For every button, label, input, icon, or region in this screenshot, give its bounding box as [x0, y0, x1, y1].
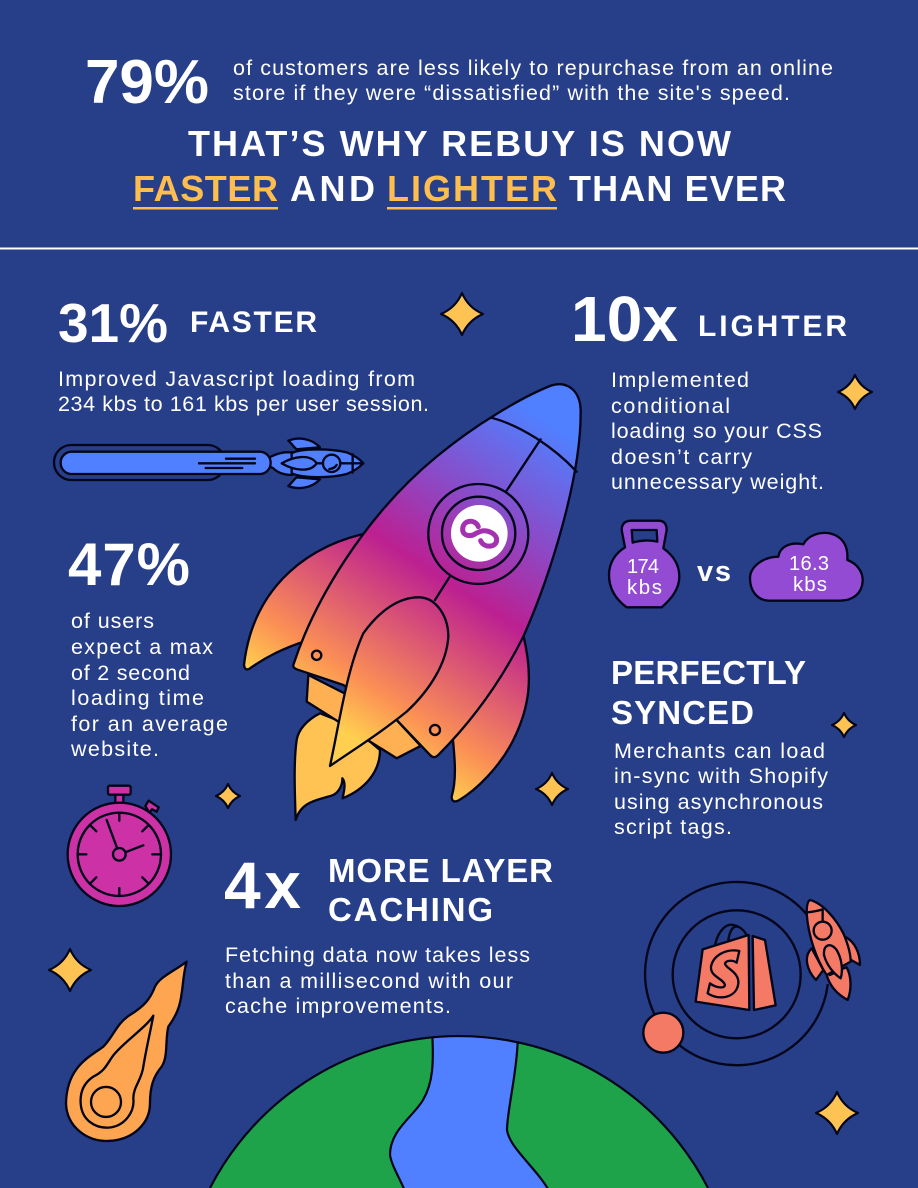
- title: THAT’S WHY REBUY IS NOW: [188, 123, 731, 164]
- stat: 10x lighter: [571, 283, 847, 494]
- flame: [295, 713, 380, 820]
- title: THAN EVER: [569, 168, 786, 209]
- kettlebell: kbs: [627, 576, 662, 599]
- right fin: [452, 635, 529, 801]
- stat: 47%: 47%: [68, 531, 190, 598]
- title: LIGHTER: [387, 168, 557, 209]
- stat: 47%: for an average: [71, 712, 228, 736]
- rocket body: [293, 384, 581, 757]
- cloud: kbs: [793, 573, 827, 596]
- section: 4x more layer caching: Fetching data now takes less: [225, 943, 530, 967]
- header stat: 79%: of customers are less likely to repurchase from an online: [233, 56, 833, 80]
- stat: 10x lighter: unnecessary weight.: [611, 470, 824, 494]
- section: 4x more layer caching: cache improvements.: [225, 994, 451, 1018]
- kettlebell: 174: [627, 556, 659, 578]
- section: perfectly synced: using asynchronous: [614, 790, 823, 814]
- icon: main rocket: [244, 384, 581, 820]
- section: perfectly synced: in-sync with Shopify: [614, 764, 828, 788]
- title: FASTER: [133, 168, 278, 209]
- stat: 47%: loading time: [71, 686, 204, 710]
- shopify bag: [696, 925, 776, 1010]
- nose and seam lines: [435, 418, 577, 600]
- stat: 31% faster: 31%: [58, 292, 168, 354]
- center fin: [330, 597, 448, 766]
- section: 4x more layer caching: than a millisecond with our: [225, 969, 513, 993]
- orbit rings: [645, 882, 828, 1065]
- section: perfectly synced: script tags.: [614, 815, 732, 839]
- stat: 31% faster: FASTER: [190, 306, 317, 339]
- section: perfectly synced: [611, 654, 828, 839]
- icon: planet earth: [210, 1030, 708, 1188]
- section: perfectly synced: Merchants can load: [614, 739, 825, 763]
- stat: 31% faster: [58, 292, 429, 416]
- stars: [49, 293, 872, 1134]
- orbiting planet: [643, 1013, 683, 1053]
- cloud: 16.3: [789, 553, 829, 575]
- cloud: [750, 533, 863, 601]
- stat: 31% faster: 234 kbs to 161 kbs per user session.: [58, 392, 429, 416]
- icon: meteor: [66, 962, 187, 1141]
- stat: 10x lighter: Implemented: [611, 368, 749, 392]
- header stat: 79%: store if they were “dissatisfied” with the site's speed.: [233, 81, 790, 105]
- section: 4x more layer caching: [224, 848, 553, 1018]
- stat: 47%: [68, 531, 228, 761]
- header stat: 79%: 79%: [85, 48, 209, 117]
- icon: small rocket with speed trail: [54, 439, 363, 488]
- stat: 31% faster: Improved Javascript loading from: [58, 367, 415, 391]
- small orbiting rocket: [807, 900, 860, 1000]
- icon: stopwatch: [68, 786, 171, 906]
- section: perfectly synced: PERFECTLY: [611, 654, 806, 691]
- icon: shopify bag with orbiting rocket: [643, 882, 860, 1065]
- nozzle: [307, 675, 421, 758]
- stat: 47%: of 2 second: [71, 661, 190, 685]
- section: perfectly synced: SYNCED: [611, 694, 754, 731]
- stat: 10x lighter: LIGHTER: [698, 310, 847, 343]
- logo badge: [428, 484, 528, 584]
- left fin: [244, 533, 370, 669]
- header stat: 79%: [85, 48, 833, 117]
- icon: kettlebell 174 kbs vs cloud 16.3 kbs: [609, 521, 863, 607]
- section: 4x more layer caching: MORE LAYER: [328, 852, 553, 889]
- section: 4x more layer caching: CACHING: [328, 891, 493, 928]
- stat: 10x lighter: 10x: [571, 283, 678, 355]
- rivets: [312, 651, 440, 735]
- stat: 47%: expect a max: [71, 635, 213, 659]
- stat: 47%: of users: [71, 609, 154, 633]
- title: [133, 123, 786, 210]
- stat: 47%: website.: [70, 737, 159, 761]
- stat: 10x lighter: doesn’t carry: [611, 445, 752, 469]
- stat: 10x lighter: loading so your CSS: [611, 419, 822, 443]
- vs label: vs: [697, 556, 731, 588]
- kettlebell: [609, 521, 679, 607]
- title: AND: [290, 168, 375, 209]
- stat: 10x lighter: conditional: [611, 394, 730, 418]
- section: 4x more layer caching: 4x: [224, 848, 301, 922]
